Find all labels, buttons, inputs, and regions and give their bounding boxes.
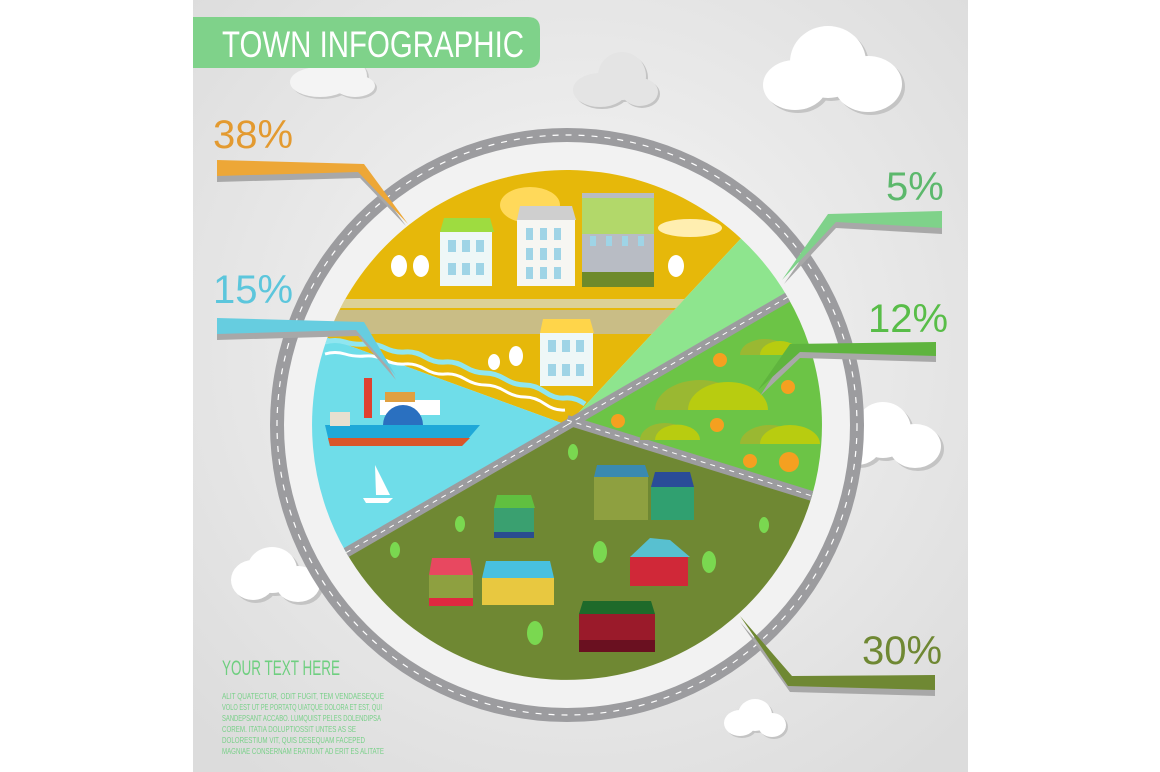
- slice: green 12%: [567, 298, 822, 495]
- body text: DOLORESTIUM VIT, QUIS DESEQUAM FACEPED: [222, 735, 365, 745]
- callout 38%: 38%: [213, 113, 293, 157]
- yellow street band: [334, 299, 684, 334]
- slice: light green 5%: [567, 238, 788, 425]
- subtitle: YOUR TEXT HERE: [222, 657, 340, 680]
- body text: [222, 691, 384, 756]
- body text: ALIT QUATECTUR, ODIT FUGIT, TEM VENDAESEQUE: [222, 691, 384, 701]
- yellow slice buildings: [391, 187, 722, 386]
- cloud: white top right: [763, 26, 905, 115]
- ring road: [270, 128, 864, 722]
- body text: MAGNIAE CONSERNAM ERATIUNT AD ERIT ES ALITATE: [222, 746, 384, 756]
- body text: VOLO EST UT PE PORTATQ UIATQUE DOLORA ET EST, QUI: [222, 702, 382, 712]
- callout 30%: [740, 616, 942, 696]
- body text: SANDEPSANT ACCABO. LUMQUIST PELES DOLENDIPSA: [222, 713, 381, 723]
- cloud: gray near title: [290, 58, 377, 99]
- slice: yellow 38%: [327, 170, 741, 425]
- callout 15%: [213, 268, 396, 380]
- body text: COREM. ITATIA DOLUPTIOSSIT UNTES AS SE: [222, 724, 356, 734]
- slice: olive 30%: [346, 425, 812, 680]
- callout 38%: [213, 113, 408, 226]
- callout 12%: [758, 297, 948, 396]
- callout 12%: 12%: [868, 297, 948, 341]
- background panel: [193, 0, 968, 772]
- ship: [325, 378, 480, 503]
- olive houses: [390, 444, 769, 652]
- cloud: white bottom: [724, 699, 788, 739]
- callout 15%: 15%: [213, 268, 293, 312]
- waves: [325, 340, 585, 410]
- cloud: white right: [833, 402, 944, 471]
- cloud: gray top middle: [573, 52, 660, 109]
- slice: blue 15%: [312, 338, 567, 552]
- inner roads: [335, 290, 825, 559]
- callout 30%: 30%: [862, 629, 942, 673]
- cloud: white left: [231, 547, 323, 605]
- pie chart: [300, 170, 825, 680]
- callout 5%: [782, 165, 944, 284]
- title banner: [193, 17, 540, 68]
- callout 5%: 5%: [886, 165, 944, 209]
- title banner: TOWN INFOGRAPHIC: [222, 24, 524, 65]
- hills and flowers: [611, 339, 820, 472]
